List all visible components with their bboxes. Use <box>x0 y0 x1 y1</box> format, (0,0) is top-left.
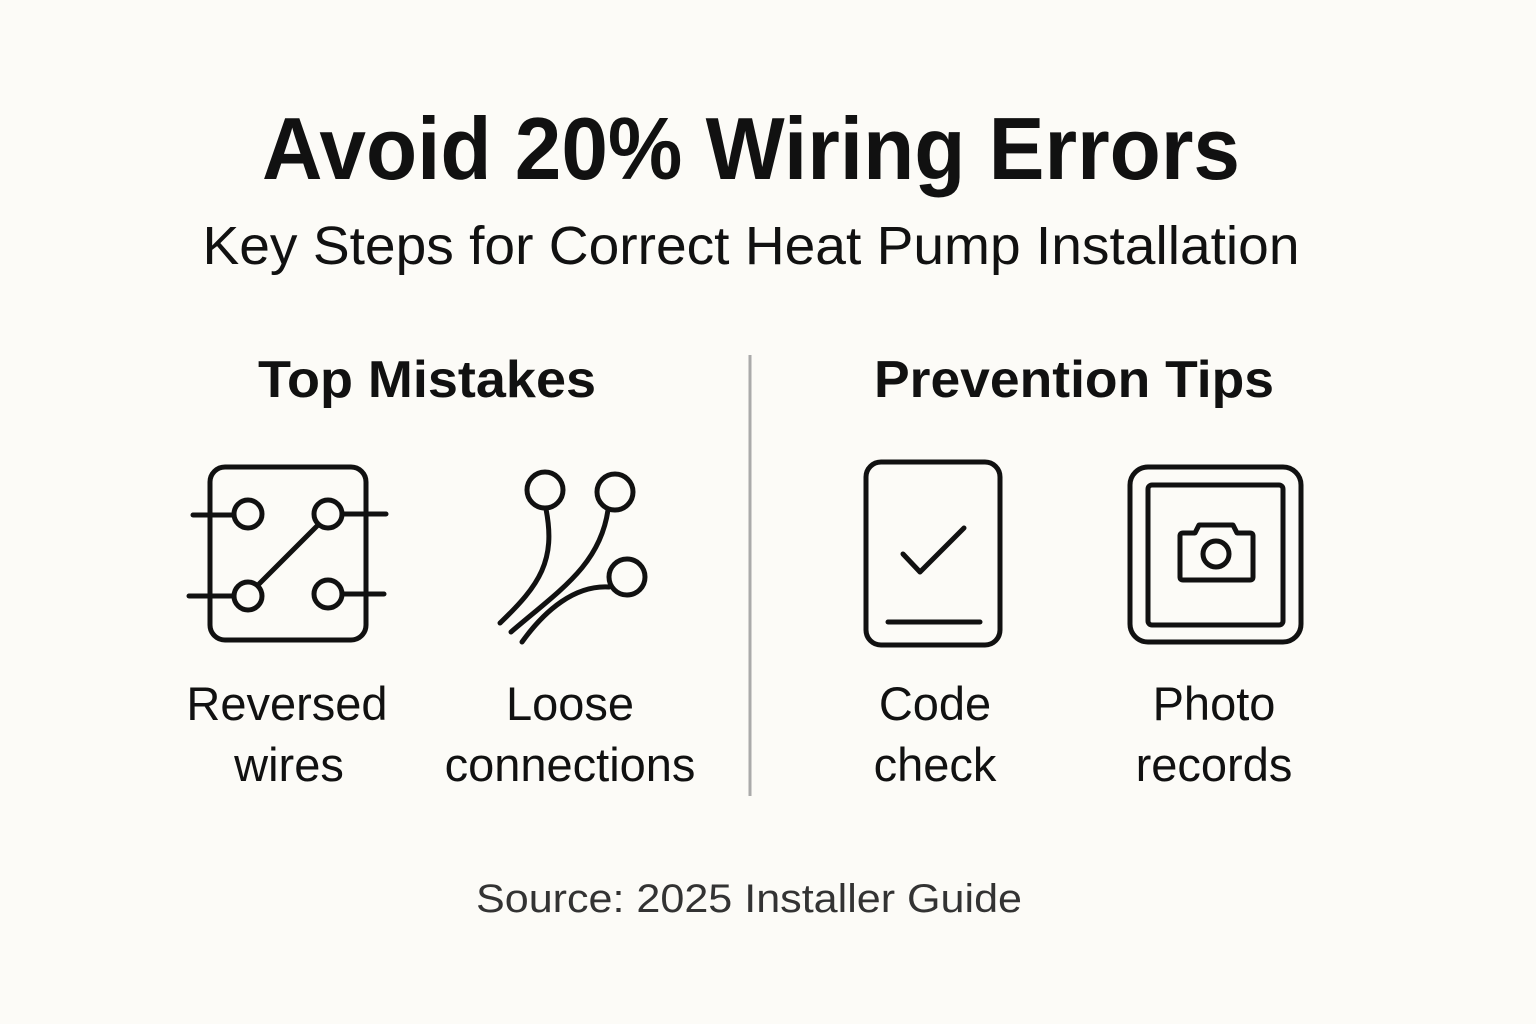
label: code check: check <box>874 738 997 791</box>
icon: reversed wires <box>189 467 386 640</box>
label: photo records: records <box>1136 738 1292 791</box>
label: reversed wires: wires <box>233 738 344 791</box>
label: loose connections: Loose <box>506 677 634 730</box>
title: Avoid 20% Wiring Errors <box>262 99 1240 198</box>
heading: prevention tips: Prevention Tips <box>874 351 1274 409</box>
subtitle: Key Steps for Correct Heat Pump Installation <box>202 216 1300 276</box>
label: loose connections: connections <box>445 738 695 791</box>
icon: code check <box>866 462 1000 645</box>
icon: loose connections <box>500 472 645 642</box>
icon: photo records <box>1130 467 1301 642</box>
label: photo records: Photo <box>1153 677 1275 730</box>
source: Source: 2025 Installer Guide <box>476 877 1022 921</box>
heading: top mistakes: Top Mistakes <box>258 351 596 409</box>
label: reversed wires: Reversed <box>186 677 388 730</box>
label: code check: Code <box>879 677 991 730</box>
